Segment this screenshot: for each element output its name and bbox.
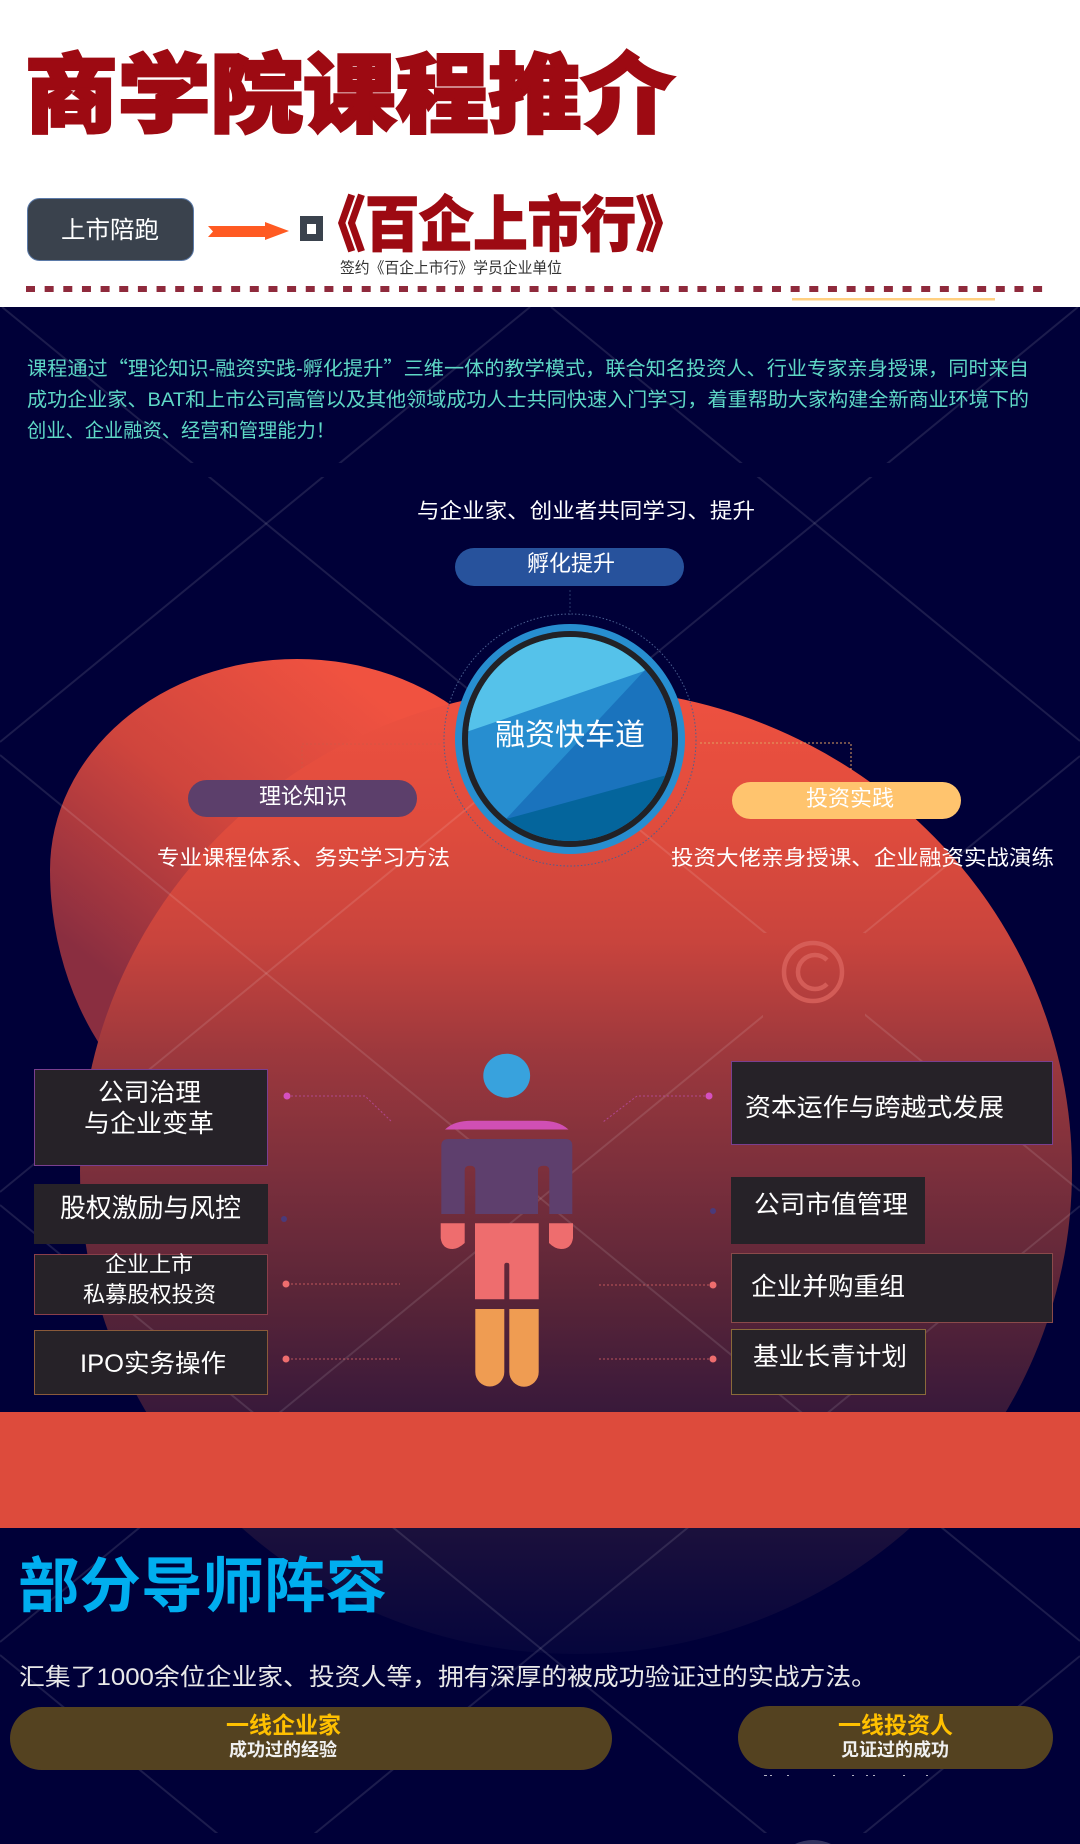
pill: 一线企业家: 成功过的经验 xyxy=(229,1739,337,1760)
box: 股权激励与风控 xyxy=(34,1184,268,1244)
box: 企业并购重组: 企业并购重组 xyxy=(751,1273,905,1301)
torso and arms xyxy=(441,1139,572,1214)
box: 企业并购重组 xyxy=(732,1254,1052,1322)
box: 资本运作与跨越式发展 xyxy=(732,1062,1052,1144)
pill: 孵化提升 xyxy=(455,548,684,586)
right leg xyxy=(509,1309,539,1387)
connector dots and lines xyxy=(281,1092,716,1362)
right topic boxes xyxy=(731,1062,1052,1394)
title: 商学院课程推介 xyxy=(25,48,674,144)
caption: 理论知识 description: 专业课程体系、务实学习方法 xyxy=(157,847,450,870)
box: 企业上市 私募股权投资: 私募股权投资 xyxy=(83,1282,216,1307)
pill: 孵化提升: 孵化提升 xyxy=(527,551,615,576)
header panel xyxy=(0,0,1080,307)
intro paragraph: 创业、企业融资、经营和管理能力！ xyxy=(27,420,335,442)
intro paragraph: 课程通过“理论知识-融资实践-孵化提升 ”三维一体的教学模式，联合知名投资人、行业专家亲身授课，同时来自 xyxy=(27,352,1029,381)
central circle: 融资快车道: 融资快车道 xyxy=(495,719,645,752)
caption: 投资实践 description: 投资大佬亲身授课、企业融资实战演练 xyxy=(671,847,1054,870)
box: 企业上市 私募股权投资 xyxy=(34,1252,268,1314)
background blob: left xyxy=(50,659,544,1160)
intro paragraph: 成功企业家、BAT和上市公司高管以及其他领域成功人士共同快速入门学习，着重帮助大家构建全新商业环境下的 xyxy=(27,389,1029,411)
icon: copyright watermark xyxy=(784,943,842,1001)
arrow xyxy=(208,222,289,240)
intro paragraph xyxy=(27,352,1029,442)
box: 公司市值管理 xyxy=(731,1177,925,1244)
dashed divider xyxy=(26,286,1045,292)
pill: 理论知识 xyxy=(188,780,417,817)
box: IPO实务操作: IPO实务操作 xyxy=(80,1350,226,1378)
box: IPO实务操作 xyxy=(34,1330,268,1394)
head xyxy=(483,1054,530,1098)
right hand xyxy=(549,1223,573,1249)
left leg xyxy=(475,1309,504,1386)
red band xyxy=(0,1412,1080,1528)
icon: small square xyxy=(300,216,323,241)
subtitle: 签约《百企上市行》学员企业单位 xyxy=(340,259,562,277)
box: 公司治理与企业变革: 公司治理 xyxy=(98,1079,201,1107)
central circle: 融资快车道 xyxy=(440,614,700,866)
pill: 理论知识: 理论知识 xyxy=(259,784,347,809)
left hand xyxy=(441,1223,465,1249)
connector lines xyxy=(302,590,851,770)
box: 股权激励与风控: 股权激励与风控 xyxy=(60,1193,241,1223)
box: 资本运作与跨越式发展: 资本运作与跨越式发展 xyxy=(745,1094,1004,1122)
box: 公司市值管理: 公司市值管理 xyxy=(754,1191,908,1219)
badge: 上市陪跑 xyxy=(28,198,194,260)
box: 基业长青计划: 基业长青计划 xyxy=(753,1343,907,1371)
box: 企业上市 私募股权投资: 企业上市 xyxy=(105,1252,193,1277)
box: 公司治理与企业变革: 与企业变革 xyxy=(84,1110,214,1138)
pill: 一线投资人 xyxy=(738,1706,1053,1769)
description: 导师阵容: 汇集了1000余位企业家、投资人等，拥有深厚的被成功验证过的实战方法。 xyxy=(19,1664,877,1691)
background blob: main circle xyxy=(80,688,1072,1654)
course title: 《百企上市行》 xyxy=(311,192,690,259)
shoulders xyxy=(445,1121,568,1130)
pill: 一线投资人: 见证过的成功 xyxy=(841,1739,949,1760)
pill: 一线企业家: 一线企业家 xyxy=(226,1712,341,1738)
pill: 投资实践 xyxy=(732,782,961,819)
pill: 投资实践: 投资实践 xyxy=(806,786,894,811)
box: 公司治理与企业变革 xyxy=(34,1070,268,1166)
box: 基业长青计划 xyxy=(732,1330,926,1394)
human figure xyxy=(441,1054,573,1387)
left topic boxes xyxy=(34,1070,268,1394)
pill: 一线投资人: 一线投资人 xyxy=(838,1712,953,1738)
caption: 孵化提升 description: 与企业家、创业者共同学习、提升 xyxy=(417,500,755,523)
badge: 上市陪跑: 上市陪跑 xyxy=(61,217,159,244)
shorts xyxy=(475,1223,539,1299)
heading: 部分导师阵容: 部分导师阵容 xyxy=(18,1553,387,1620)
pill: 一线企业家 xyxy=(10,1707,612,1770)
